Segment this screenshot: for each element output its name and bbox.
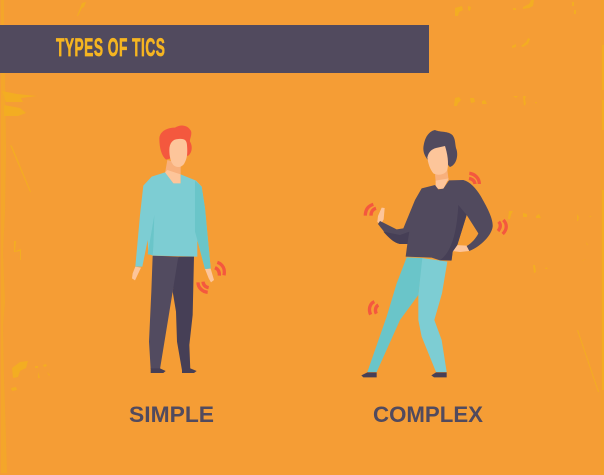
neck	[435, 170, 449, 183]
figure: simple tic person	[132, 125, 224, 373]
hair	[159, 125, 192, 160]
shoes	[151, 368, 197, 373]
hair	[423, 130, 457, 167]
face	[169, 139, 187, 167]
title: TYPES OF TICS	[56, 35, 165, 62]
shoes	[361, 372, 447, 377]
sweater	[135, 172, 211, 269]
neck	[165, 160, 181, 184]
label: simple: SIMPLE	[129, 402, 214, 427]
sweater	[378, 180, 493, 260]
hands	[132, 267, 214, 282]
label: complex: COMPLEX	[373, 402, 483, 427]
hands	[377, 208, 469, 252]
icon: twitch waves	[365, 173, 506, 315]
figure: complex tic person	[361, 130, 506, 377]
face	[427, 146, 448, 175]
title banner	[0, 25, 429, 73]
pants	[149, 256, 178, 369]
icon: twitch waves	[198, 262, 224, 292]
pants	[418, 258, 447, 372]
